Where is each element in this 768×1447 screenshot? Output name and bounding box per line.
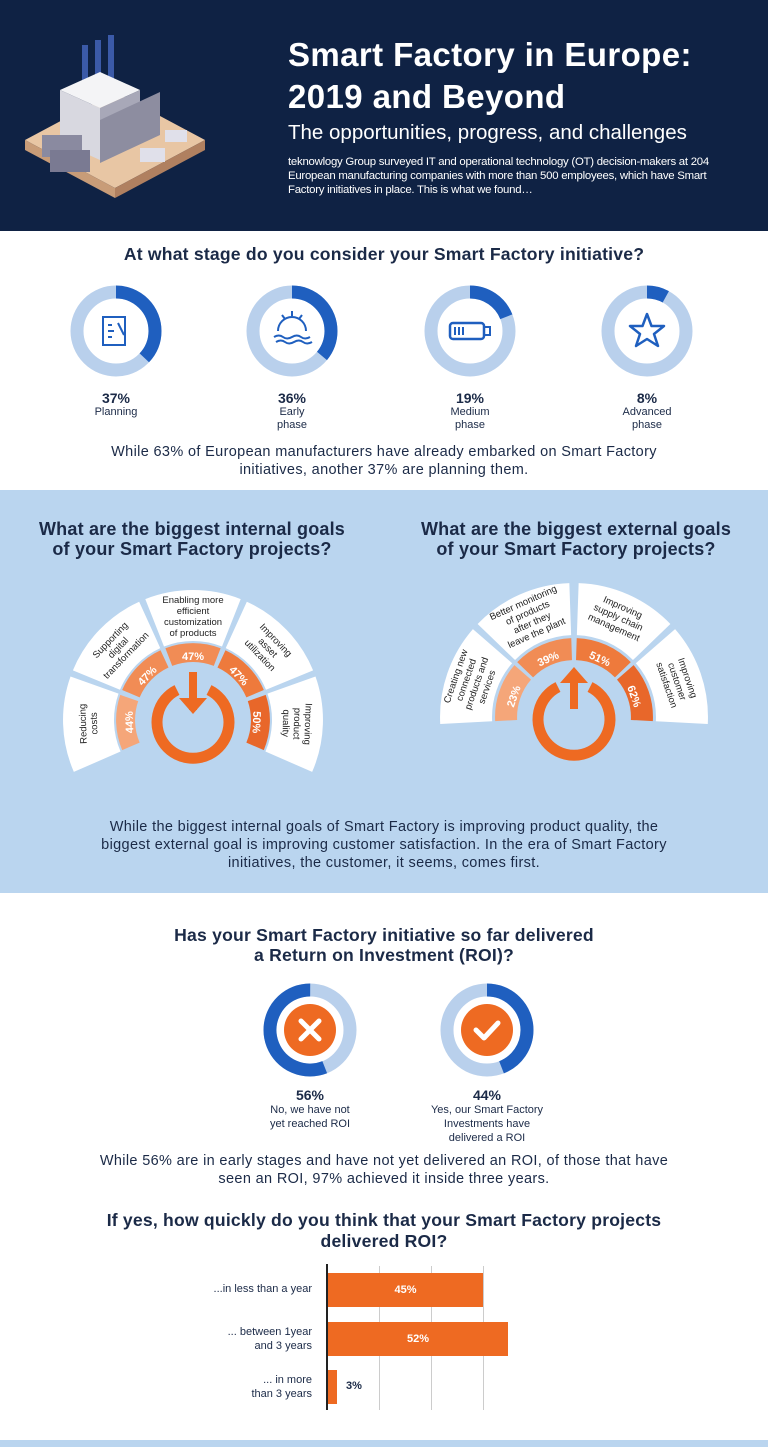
- summary text: ROI: seen an ROI, 97% achieved it inside three years.: [218, 1171, 550, 1187]
- donut: early 36%: 36%: [278, 390, 306, 406]
- summary text: stages: While 63% of European manufacturers have already embarked on Smart Factory initiatives, another 37% are planning them.: [111, 444, 657, 478]
- bar: more than 3 years 3%: [251, 1370, 362, 1404]
- heading: external goals: What are the biggest external goals: [421, 519, 731, 539]
- heading: ROI question: [174, 925, 594, 965]
- chart: stage donuts: [70, 286, 692, 431]
- donut: medium 19%: [424, 286, 516, 431]
- chart: internal goals fan: 47%: [226, 664, 250, 688]
- chart: ROI donuts: Investments have: [444, 1118, 530, 1130]
- chart: ROI donuts: 44%: [473, 1087, 501, 1103]
- chart: external goals fan: 51%: [587, 649, 612, 669]
- chart: external goals fan: satisfaction: [653, 661, 679, 710]
- chart: ROI donuts: [264, 984, 543, 1144]
- heading: stage question: At what stage do you consider your Smart Factory initiative?: [124, 244, 644, 264]
- bar: less than a year 45%: ...in less than a year: [214, 1283, 312, 1295]
- donut: medium 19%: 19%: [456, 390, 484, 406]
- bar: more than 3 years 3%: ... in more: [263, 1374, 312, 1386]
- chart: internal goals fan: costs: [89, 712, 100, 735]
- chart: external goals fan: Improving: [675, 657, 699, 700]
- chart: ROI donuts: delivered a ROI: [449, 1132, 525, 1144]
- heading: external goals: of your Smart Factory projects?: [436, 539, 716, 559]
- chart: external goals fan: leave the plant: [506, 616, 568, 651]
- chart: internal goals fan: Enabling more: [162, 595, 224, 606]
- heading: internal goals: What are the biggest internal goals: [39, 519, 345, 539]
- heading: ROI speed: delivered ROI?: [320, 1231, 447, 1251]
- chart: internal goals fan: Improving: [257, 622, 294, 659]
- bar: more than 3 years 3%: 3%: [346, 1380, 362, 1392]
- chart: internal goals fan: quality: [279, 709, 291, 737]
- summary text: ROI: While 56% are in early stages and have not yet delivered an ROI, of those that have: [100, 1153, 668, 1169]
- donut: planning 37%: [70, 286, 162, 418]
- heading: ROI speed: If yes, how quickly do you think that your Smart Factory projects: [107, 1210, 661, 1230]
- donut: early 36%: [246, 286, 338, 431]
- chart: external goals fan: connected: [454, 658, 479, 703]
- chart: external goals fan: Creating new: [442, 648, 471, 705]
- heading: internal goals: of your Smart Factory projects?: [52, 539, 332, 559]
- donut: advanced 8%: Advanced: [623, 406, 671, 418]
- donut: early 36%: Early: [279, 406, 305, 418]
- heading: external goals: [421, 519, 731, 559]
- donut: yes 44%: [431, 984, 543, 1144]
- title: 2019 and Beyond: [288, 78, 565, 115]
- chart: internal goals fan: product: [290, 708, 302, 740]
- chart: internal goals fan: efficient: [177, 606, 210, 617]
- donut: early 36%: phase: [277, 419, 307, 431]
- donut: advanced 8%: 8%: [637, 390, 657, 406]
- donut: no 56%: [264, 984, 356, 1130]
- chart: external goals fan: Improving: [601, 594, 644, 621]
- donut: planning 37%: Planning: [95, 406, 137, 418]
- summary text: goals: While the biggest internal goals of Smart Factory is improving product quality, the biggest external goal is improving customer satisfaction. In the era of Smart Factory initiatives, the customer, it seems, comes first.: [101, 819, 667, 871]
- chart: external goals fan: Better monitoring: [488, 584, 559, 623]
- bar: 1-3 years 52%: ... between 1year: [228, 1326, 312, 1338]
- chart: external goals fan: 39%: [536, 649, 561, 669]
- bar: less than a year 45%: 45%: [394, 1284, 417, 1296]
- chart: ROI donuts: Yes, our Smart Factory: [431, 1104, 543, 1116]
- bar chart: ROI speed: [214, 1264, 508, 1410]
- chart: external goals fan: 62%: [624, 684, 643, 709]
- title: Smart Factory in Europe:: [288, 36, 692, 73]
- chart: external goals fan: 23%: [505, 684, 524, 709]
- chart: internal goals fan: [63, 590, 323, 772]
- donut: advanced 8%: [602, 286, 692, 431]
- chart: internal goals fan: 47%: [136, 664, 160, 688]
- chart: internal goals fan: of products: [170, 628, 217, 639]
- header panel: [0, 0, 768, 231]
- donut: medium 19%: Medium: [450, 406, 490, 418]
- bar: 1-3 years 52%: [228, 1322, 508, 1356]
- chart: internal goals fan: digital: [106, 635, 131, 661]
- panel: goals: [0, 490, 768, 893]
- chart: internal goals fan: customization: [164, 617, 222, 628]
- chart: external goals fan: supply chain: [592, 602, 644, 634]
- donut: medium 19%: phase: [455, 419, 485, 431]
- chart: external goals fan: management: [586, 612, 642, 644]
- chart: external goals fan: products and: [463, 656, 491, 711]
- chart: internal goals fan: transformation: [101, 630, 152, 681]
- icon: factory illustration: [25, 35, 205, 198]
- chart: internal goals fan: asset: [256, 636, 280, 660]
- chart: ROI donuts: No, we have not: [270, 1104, 350, 1116]
- bar: 1-3 years 52%: 52%: [407, 1333, 429, 1345]
- donut: planning 37%: 37%: [102, 390, 130, 406]
- chart: internal goals fan: 47%: [182, 651, 204, 663]
- summary text: ROI: [100, 1153, 668, 1187]
- chart: internal goals fan: Supporting: [91, 620, 131, 661]
- chart: internal goals fan: 44%: [124, 711, 136, 733]
- heading: ROI question: Has your Smart Factory initiative so far delivered: [174, 925, 594, 945]
- chart: external goals fan: services: [477, 669, 498, 705]
- donut: advanced 8%: phase: [632, 419, 662, 431]
- subtitle: The opportunities, progress, and challenges: [288, 121, 687, 144]
- chart: internal goals fan: 50%: [250, 711, 262, 734]
- heading: ROI question: a Return on Investment (ROI)?: [254, 945, 514, 965]
- chart: internal goals fan: utilization: [242, 638, 277, 674]
- bar: more than 3 years 3%: than 3 years: [251, 1388, 312, 1400]
- heading: ROI speed: [107, 1210, 661, 1251]
- intro text: teknowlogy Group surveyed IT and operational technology (OT) decision-makers at 204 European manufacturing companies with more than 500 employees, which have Smart Factory initiatives in place. This is what we found…: [288, 156, 709, 196]
- title: [288, 36, 692, 115]
- chart: external goals fan: after they: [512, 610, 553, 636]
- bar: less than a year 45%: [214, 1273, 483, 1307]
- bar: 1-3 years 52%: and 3 years: [255, 1340, 312, 1352]
- chart: ROI donuts: yet reached ROI: [270, 1118, 350, 1130]
- chart: ROI donuts: 56%: [296, 1087, 324, 1103]
- heading: internal goals: [39, 519, 345, 559]
- chart: internal goals fan: Reducing: [77, 704, 90, 744]
- chart: external goals fan: [440, 583, 708, 761]
- chart: external goals fan: customer: [665, 661, 688, 702]
- chart: internal goals fan: Improving: [301, 703, 314, 745]
- chart: external goals fan: of products: [504, 599, 552, 628]
